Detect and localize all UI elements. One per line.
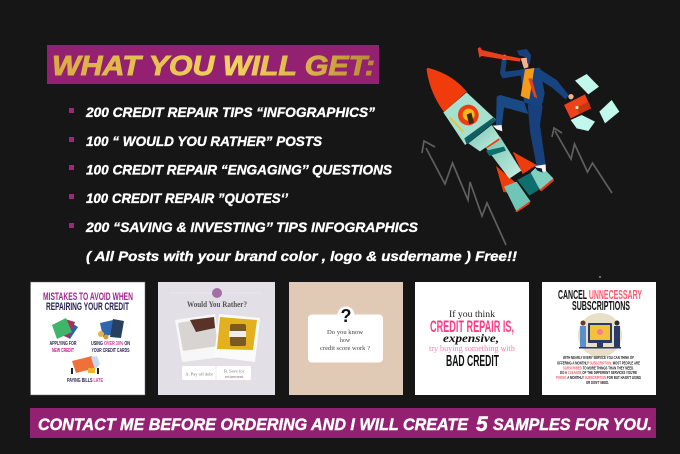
feature list: 100 “ WOULD YOU RATHER” POSTS <box>86 133 323 149</box>
card 1: mistakes to avoid: REPAIRING YOUR CREDIT <box>46 301 129 313</box>
card 1: mistakes to avoid: PAYING BILLS LATE <box>67 378 103 384</box>
feature list: ( All Posts with your brand color , logo & usdername ) Free!! <box>86 248 517 264</box>
card 4: credit repair quote: BAD CREDIT <box>446 353 499 370</box>
card 3: credit score question: ? <box>340 306 352 326</box>
answer buttons: retirement <box>225 374 244 379</box>
contact banner <box>30 408 656 438</box>
arrow: left zigzag <box>422 141 506 245</box>
card 1: mistakes to avoid <box>30 282 145 395</box>
contact banner: CONTACT ME BEFORE ORDERING AND I WILL CREATE <box>38 416 469 434</box>
card 1: mistakes to avoid: USING OVER 30% ON <box>91 341 130 347</box>
card 5: cancel subscriptions: SUBSCRIPTIONS <box>572 299 630 313</box>
card 1: mistakes to avoid: MISTAKES TO AVOID WHEN <box>43 291 133 303</box>
card 4: credit repair quote: If you think <box>449 309 495 320</box>
body copy: PAYING A MONTHLY SUBSCRIPTION FOR BUT HASN'T USING <box>556 375 641 380</box>
card 4: credit repair quote: CREDIT REPAIR IS, <box>430 318 514 336</box>
answer buttons: A. Pay off debt <box>185 372 213 376</box>
icon: credit cards <box>52 318 78 339</box>
icon: calculator and coins <box>98 319 124 340</box>
rocket neck <box>485 137 521 179</box>
card 3: credit score question: how <box>340 338 351 344</box>
title banner: WHAT YOU WILL GET: <box>52 50 375 81</box>
rocket emblem: light bulb <box>450 105 479 132</box>
contact banner: SAMPLES FOR YOU. <box>493 416 652 434</box>
rocket nose <box>427 68 467 112</box>
flying papers <box>571 74 619 131</box>
feature list: 100 CREDIT REPAIR “ENGAGING’’ QUESTIONS <box>86 162 393 178</box>
feature list: 200 “SAVING & INVESTING’’ TIPS INFOGRAPHICS <box>85 219 419 235</box>
logo badge <box>212 288 222 298</box>
card 3: credit score question <box>289 282 403 395</box>
contact banner: 5 <box>476 413 488 436</box>
rocket body <box>443 92 500 151</box>
body copy: WITH NEARLY EVERY SERVICE YOU CAN THINK OF <box>563 355 634 360</box>
body copy: OFFERING A MONTHLY SUBSCRIPTION, MOST PEOPLE ARE <box>557 360 640 366</box>
feature list: 100 CREDIT REPAIR ”QUOTES‘’ <box>86 190 289 206</box>
feature list: 200 CREDIT REPAIR TIPS “INFOGRAPHICS” <box>85 104 375 120</box>
card 4: credit repair quote: expensive, <box>443 333 499 345</box>
body copy <box>556 355 641 385</box>
card 1: mistakes to avoid: APPLYING FOR <box>50 341 77 347</box>
illustration: rocket and businessman <box>427 47 619 212</box>
card 1: mistakes to avoid: NEW CREDIT <box>52 348 74 354</box>
photo: pay off debt <box>175 314 222 362</box>
rocket fins <box>496 152 554 212</box>
card 4: credit repair quote: try buying something with <box>429 344 515 353</box>
card 2: would you rather: Would You Rather? <box>187 300 247 309</box>
businessman <box>478 47 574 173</box>
card 1: mistakes to avoid: YOUR CREDIT CARDS <box>92 348 130 354</box>
card 5: cancel subscriptions <box>542 282 656 395</box>
feature list <box>69 104 517 264</box>
icon: bills illustration <box>71 356 100 374</box>
arrow: right zigzag <box>552 128 612 193</box>
card 3: credit score question: Do you know <box>327 330 364 336</box>
briefcase <box>564 94 591 118</box>
body copy: OR DON'T NEED. <box>586 380 609 385</box>
small mark <box>599 276 601 278</box>
card 2: would you rather <box>158 282 275 395</box>
body copy: DO A CLEANSE OF THE DIFFERENT SERVICES YOU'RE <box>560 370 637 375</box>
body copy: SUBSCRIBED TO MORE THINGS THAN THEY NEED. <box>563 366 634 370</box>
illustration: people and monitor <box>578 313 622 357</box>
photo: save for retirement <box>214 314 260 362</box>
card 4: credit repair quote <box>415 282 529 395</box>
card 3: credit score question: credit score work ? <box>320 346 370 352</box>
answer buttons: B. Save for <box>224 368 245 374</box>
answer buttons <box>182 366 251 380</box>
